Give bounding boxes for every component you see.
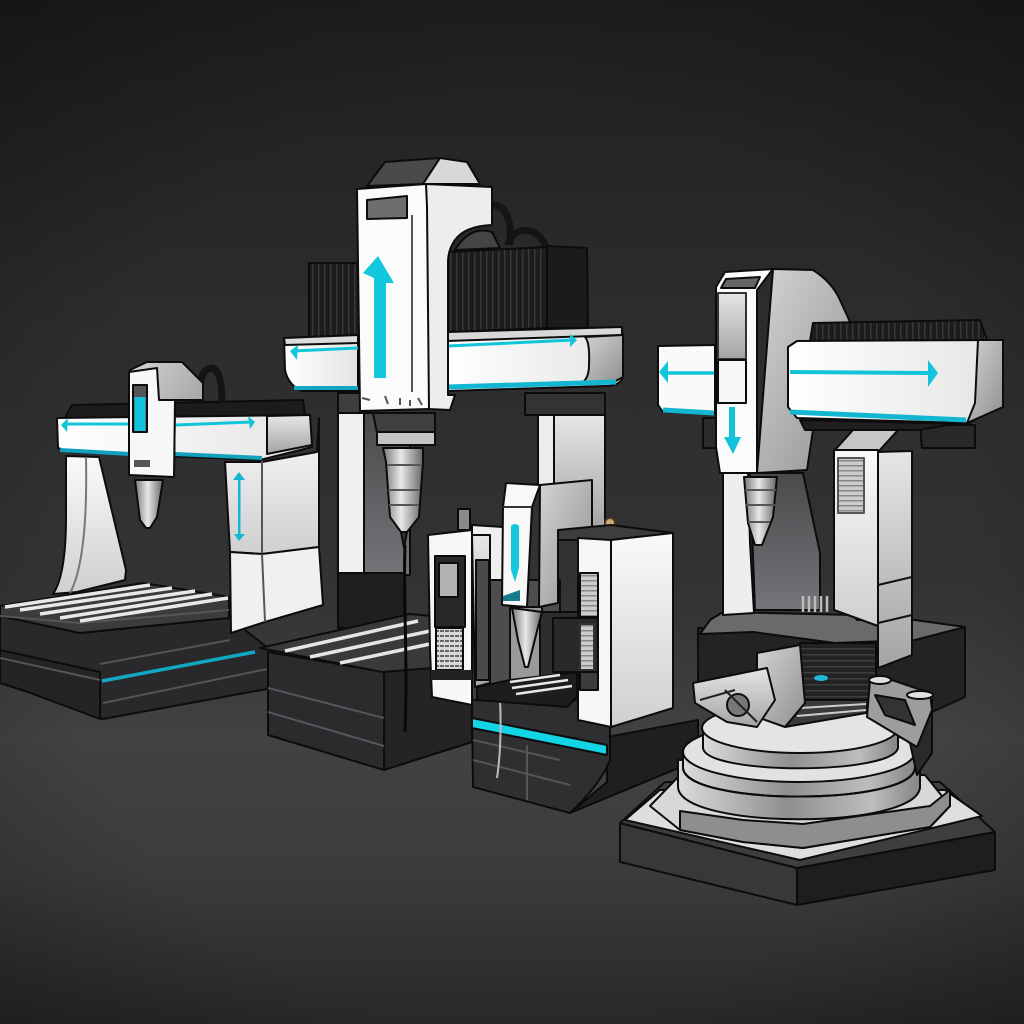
fin block	[785, 643, 876, 727]
carriage	[129, 362, 222, 477]
cooling fins and cables	[309, 205, 588, 337]
machine base	[0, 616, 273, 719]
base	[472, 698, 698, 813]
side clamp	[867, 676, 933, 775]
rear panel	[472, 525, 503, 582]
arrow: vertical axis	[363, 256, 394, 378]
arrow: vertical axis	[233, 472, 245, 541]
rear fins	[803, 596, 827, 612]
hanging cable	[405, 545, 406, 732]
cross beam	[788, 320, 1003, 448]
left leg	[338, 393, 410, 628]
rear base	[698, 612, 965, 712]
plinth	[620, 782, 995, 905]
arrow: down	[724, 407, 741, 454]
left beam stub	[658, 345, 717, 448]
left leg	[53, 456, 126, 594]
table base	[268, 650, 472, 770]
right leg	[525, 393, 605, 530]
column	[716, 269, 860, 473]
control cabinet	[428, 509, 490, 705]
spindle	[373, 413, 435, 548]
spindle	[744, 477, 777, 545]
right leg	[225, 418, 323, 633]
head column	[502, 480, 592, 607]
spindle	[512, 608, 542, 667]
left leg	[723, 473, 754, 615]
grey back panel	[750, 473, 820, 610]
worktable	[0, 583, 229, 633]
machine: central worktable	[260, 545, 472, 770]
machine: small vertical machining centre	[428, 480, 698, 813]
chamber	[477, 580, 580, 707]
motor housing	[757, 645, 805, 727]
spindle nose	[693, 668, 775, 727]
machine: right gantry	[658, 269, 1003, 712]
right door panel	[553, 518, 673, 727]
rotary rings	[678, 703, 920, 819]
cross beam left	[284, 335, 358, 391]
column	[357, 158, 492, 411]
cross beam right	[447, 327, 623, 391]
cross beam	[57, 400, 312, 460]
white step plate	[625, 775, 982, 860]
right leg	[834, 430, 912, 668]
table top with rails	[260, 614, 432, 672]
machine: left gantry	[0, 362, 323, 719]
machine: tall central gantry	[284, 158, 623, 628]
machine: rotary table	[620, 596, 995, 905]
spindle	[135, 480, 163, 528]
